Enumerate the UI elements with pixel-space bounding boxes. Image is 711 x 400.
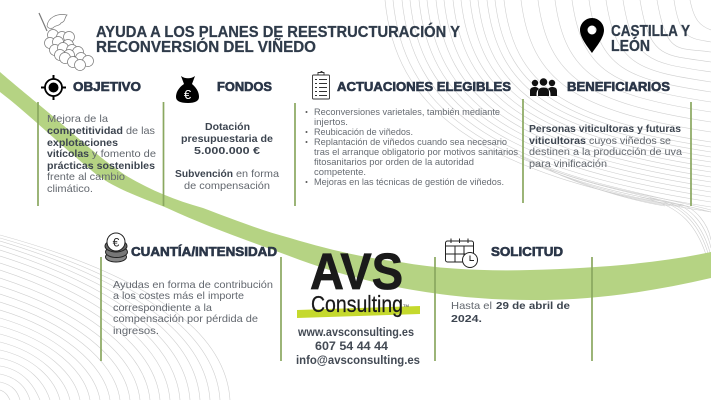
text: fondos: Subvención <box>175 168 233 180</box>
text: cuantía: Ayudas en forma de contribución <box>113 279 273 291</box>
text: objetivo: Mejora de la <box>47 113 108 125</box>
text: objetivo <box>47 113 156 195</box>
bulleted list: competente. <box>314 167 366 177</box>
bulleted list: Reconversiones varietales, también mediante <box>314 107 500 117</box>
icon: calendar with clock <box>446 238 478 268</box>
icon: grapes <box>39 13 94 70</box>
logo: AVS Consulting <box>297 243 420 318</box>
contact details: info@avsconsulting.es <box>296 355 420 367</box>
text: fondos: de compensación <box>184 180 270 192</box>
text: solicitud <box>451 300 570 325</box>
text: objetivo: de las <box>126 125 155 137</box>
logo: AVS Consulting: AVS <box>310 243 403 300</box>
logo: AVS Consulting: TM <box>403 303 409 308</box>
bulleted list: tras el arranque obligatorio por motivos sanitarios <box>314 147 518 157</box>
panel: actuaciones elegibles <box>306 72 518 187</box>
bulleted list: Reubicación de viñedos. <box>314 127 413 137</box>
title <box>96 23 461 56</box>
title: RECONVERSIÓN DEL VIÑEDO <box>96 38 316 56</box>
heading: beneficiarios: BENEFICIARIOS <box>567 80 670 94</box>
region label <box>611 23 691 55</box>
icon: target <box>41 75 66 100</box>
green curved band <box>0 72 711 300</box>
contact details: 607 54 44 44 <box>315 341 389 353</box>
title: AYUDA A LOS PLANES DE REESTRUCTURACIÓN Y <box>96 23 461 41</box>
heading: objetivo: OBJETIVO <box>73 80 141 94</box>
text: objetivo: frente al cambio <box>47 171 125 183</box>
icon: coins: € <box>113 236 120 250</box>
text: objetivo: competitividad <box>47 125 123 137</box>
region label: CASTILLA Y <box>611 23 691 40</box>
bulleted list: injertos. <box>314 117 348 127</box>
text: fondos: en forma <box>236 168 279 180</box>
text: objetivo: climático. <box>47 183 93 195</box>
text: solicitud: 2024. <box>451 313 482 325</box>
text: fondos: 5.000.000 € <box>194 145 260 157</box>
icon: clipboard checklist <box>312 72 330 99</box>
bulleted list: Mejoras en las técnicas de gestión de viñedos. <box>314 177 504 187</box>
text: solicitud: Hasta el <box>451 300 492 312</box>
text: beneficiarios <box>529 123 682 170</box>
text: fondos: Dotación <box>205 121 250 133</box>
panel: objetivo <box>41 75 156 195</box>
panel: solicitud <box>446 238 570 325</box>
heading: cuantía/intensidad: CUANTÍA/INTENSIDAD <box>131 244 277 259</box>
panel: fondos <box>175 76 279 192</box>
text: fondos <box>175 121 279 192</box>
text: objetivo: y fomento de <box>92 148 156 160</box>
logo: AVS Consulting: Consulting <box>311 291 403 317</box>
text: beneficiarios: destinen a la producción de uva <box>529 146 682 158</box>
text: cuantía: ingresos. <box>113 325 159 337</box>
text: beneficiarios: Personas viticultoras y futuras <box>529 123 681 135</box>
text: cuantía <box>113 279 273 337</box>
text: beneficiarios: para vinificación <box>529 158 607 170</box>
icon: people <box>530 78 557 96</box>
text: objetivo: vitícolas <box>47 148 89 160</box>
panel: beneficiarios <box>529 78 682 170</box>
text: objetivo: explotaciones <box>47 137 118 149</box>
region label: LEÓN <box>611 37 650 55</box>
text: cuantía: correspondiente a la <box>113 302 212 314</box>
heading: solicitud: SOLICITUD <box>491 245 563 259</box>
icon: location pin <box>580 18 604 53</box>
text: cuantía: a los costes más el importe <box>113 290 244 302</box>
icon: money bag: € <box>184 87 192 102</box>
text: fondos: presupuestaria de <box>181 133 273 145</box>
bulleted list: Replantación de viñedos cuando sea necesario <box>314 137 507 147</box>
text: cuantía: compensación por pérdida de <box>113 313 258 325</box>
bulleted list <box>306 107 518 187</box>
contact details: www.avsconsulting.es <box>297 327 414 339</box>
text: objetivo: prácticas sostenibles <box>47 160 155 172</box>
text: beneficiarios: cuyos viñedos se <box>589 135 671 147</box>
icon: coins <box>105 233 128 262</box>
bulleted list: fitosanitarios por orden de la autoridad <box>314 157 474 167</box>
text: solicitud: 29 de abril de <box>496 300 570 312</box>
heading: actuaciones elegibles: ACTUACIONES ELEGIBLES <box>337 80 511 94</box>
text: beneficiarios: viticultoras <box>529 135 586 147</box>
panel: cuantía/intensidad <box>105 233 277 337</box>
heading: fondos: FONDOS <box>217 80 272 94</box>
contact details <box>296 327 420 367</box>
